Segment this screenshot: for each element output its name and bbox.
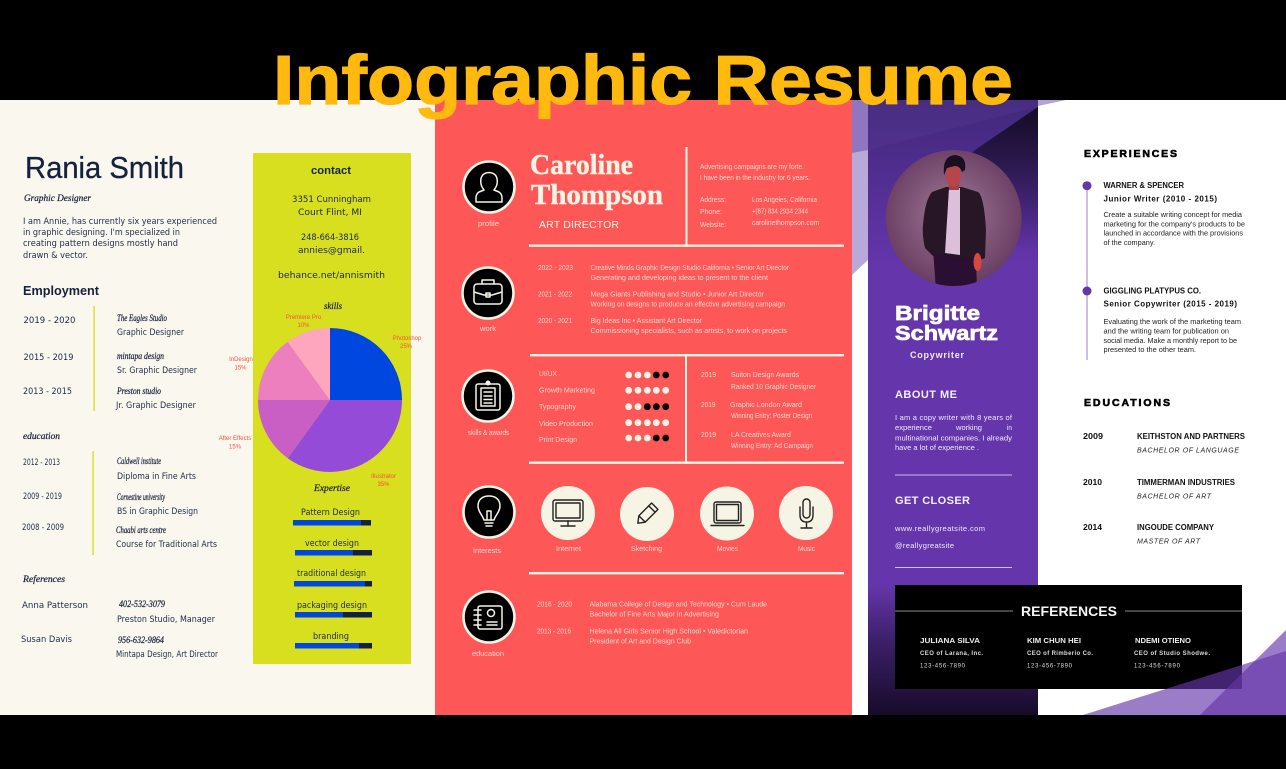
references list: Mintapa Design, Art Director [116, 650, 218, 660]
education entries: 2010 [1083, 478, 1103, 487]
educations heading: EDUCATIONS [1084, 397, 1170, 409]
work history: Generating and developing ideas to present to the client [590, 275, 768, 282]
portrait photo [886, 150, 1022, 290]
reference: Kim Chun Hei: 123-456-7890 [1027, 664, 1073, 670]
expertise bars: branding [313, 632, 349, 642]
experience entry: Giggling Platypus: Senior Copywriter (2015 - 2019) [1104, 300, 1237, 308]
awards list: Winning Entry: Poster Design [731, 413, 812, 420]
about me text: experience [895, 423, 932, 432]
icon: sketching pencil [620, 487, 674, 541]
panel: Caroline Thompson resume [435, 100, 852, 715]
icon: movies laptop [700, 486, 754, 540]
name heading [895, 303, 998, 345]
education entries: 2014 [1083, 523, 1103, 532]
references list: 956-632-9864 [118, 635, 164, 645]
education timeline: Course for Traditional Arts [116, 540, 218, 550]
expertise bars: vector design [305, 539, 359, 549]
skills list [539, 371, 595, 444]
awards list: 2019 [701, 432, 716, 439]
profile text: Address: [700, 197, 726, 204]
awards list: LA Creatives Award [731, 432, 791, 439]
education history: Alabama College of Design and Technology • Cum Laude [590, 602, 767, 608]
education timeline: 2012 - 2013 [23, 458, 60, 468]
panel: Rania Smith resume [0, 100, 435, 715]
pie labels [219, 315, 422, 488]
reference: Juliana Silva: 123-456-7890 [920, 664, 966, 670]
education timeline: Diploma in Fine Arts [117, 472, 197, 482]
reference: Ndemi Otieno: 123-456-7890 [1134, 664, 1181, 670]
bio text: in graphic designing. I'm specialized in [23, 228, 180, 238]
education timeline: 2008 - 2009 [22, 523, 64, 533]
about me heading: ABOUT ME [895, 389, 957, 401]
icon: interests bulb [464, 486, 514, 538]
contact details: behance.net/annismith [278, 271, 385, 281]
work history: Big Ideas Inc • Assistant Art Director [590, 318, 703, 325]
contact details: annies@gmail. [298, 246, 365, 256]
shirt [945, 188, 960, 255]
job title: Copywriter [910, 350, 964, 360]
jacket [923, 187, 986, 262]
work history: Working on designs to produce an effective advertising campaign [590, 302, 785, 308]
awards list: Ranked 10 Graphic Designer [731, 384, 817, 391]
name heading: Schwartz [895, 323, 998, 345]
face [946, 166, 961, 187]
education entries: 2009 [1083, 432, 1104, 441]
icon: internet monitor [541, 486, 595, 540]
job title: Graphic Designer [24, 193, 92, 203]
work history: Mega Giants Publishing and Studio • Junior Art Director [590, 292, 765, 298]
divider lines [529, 147, 844, 574]
icon: work briefcase [462, 268, 514, 318]
expertise bars: Pattern Design [301, 508, 360, 518]
contact links [894, 524, 985, 550]
name heading: Rania Smith [25, 150, 184, 185]
skills list: Print Design [539, 437, 577, 444]
reference: Juliana Silva: JULIANA SILVA [920, 636, 981, 645]
divider [895, 567, 1012, 568]
pie labels: 15% [234, 366, 247, 372]
experience entry: Warner and Spencer [1104, 181, 1245, 247]
employment timeline: Jr. Graphic Designer [115, 401, 196, 411]
about me text: multinational companies. I already [895, 434, 1012, 442]
awards list: 2019 [701, 372, 716, 379]
experience entry: Giggling Platypus: Evaluating the work of the marketing team [1104, 319, 1241, 326]
icon: music microphone [779, 486, 833, 540]
education entries: MASTER OF ART [1137, 538, 1201, 546]
name heading: Brigitte [895, 303, 980, 325]
job title: ART DIRECTOR [539, 219, 619, 231]
about me text: have a lot of experience . [895, 443, 979, 452]
employment heading: Employment [23, 283, 100, 298]
education entries: BACHELOR OF ART [1137, 494, 1212, 500]
pie labels: InDesign [229, 357, 253, 363]
icon label: internet: Internet [556, 546, 581, 553]
education history: Bachelor of Fine Arts Major in Advertising [590, 612, 719, 618]
pie labels: 25% [400, 344, 413, 350]
references list [21, 599, 218, 660]
references list: Anna Patterson [22, 601, 88, 611]
profile text: +(87) 834 2934 2344 [752, 208, 808, 216]
icon label: work: work [479, 326, 497, 333]
contact details: 3351 Cunningham [292, 195, 371, 205]
skills list: Video Production [539, 421, 593, 428]
reference: Ndemi Otieno [1134, 636, 1210, 670]
education entries: TIMMERMAN INDUSTRIES [1137, 478, 1236, 487]
contact links: @reallygreatsite [895, 541, 954, 550]
work history: 2022 - 2023 [538, 265, 573, 272]
pie labels: After Effects [219, 436, 251, 442]
experience entry: Warner and Spencer: WARNER & SPENCER [1104, 181, 1184, 190]
bio text: creating pattern designs mostly hand [23, 239, 178, 249]
skills list: Growth Marketing [539, 388, 595, 394]
bio text [23, 217, 217, 261]
icon label: interests: Interests [473, 548, 502, 555]
employment timeline [23, 306, 197, 411]
references list: Susan Davis [21, 635, 73, 645]
experience entry: Giggling Platypus: GIGGLING PLATYPUS CO. [1104, 286, 1201, 296]
decorative bottom right shapes [1083, 630, 1286, 715]
experience entry: Giggling Platypus [1104, 286, 1241, 354]
work history: 2021 - 2022 [538, 292, 572, 298]
title: Infographic Resume [273, 41, 1013, 119]
education history: President of Art and Design Club [590, 638, 691, 646]
bio text: I am Annie, has currently six years experienced [23, 217, 217, 227]
pie labels: Photoshop [393, 336, 422, 342]
employment timeline: 2019 - 2020 [24, 316, 76, 326]
experience entry: Giggling Platypus: and the writing team for publication on [1104, 328, 1229, 336]
experience entry: Warner and Spencer: Junior Writer (2010 - 2015) [1104, 194, 1217, 204]
references list: Preston Studio, Manager [117, 615, 215, 625]
expertise bars: packaging design [297, 601, 367, 611]
profile text: Los Angeles, California [752, 197, 817, 204]
profile text [700, 164, 819, 229]
bio text: drawn & vector. [23, 251, 88, 261]
education timeline: 2009 - 2019 [23, 492, 62, 502]
contact details: Court Flint, MI [298, 208, 362, 218]
hand [974, 253, 982, 271]
experience entry: Giggling Platypus: social media. Make a monthly report to be [1104, 338, 1237, 345]
about me text: working [955, 423, 982, 432]
expertise bars [293, 508, 372, 648]
contact details: 248-664-3816 [301, 233, 359, 243]
awards list: 2019 [701, 402, 716, 409]
icon label: profile: profile [478, 221, 499, 228]
profile text: Advertising campaigns are my forte. [700, 164, 804, 171]
education entries [1083, 432, 1246, 546]
work history: Creative Minds Graphic Design Studio California • Senior Art Director [590, 265, 790, 272]
about me text: I am a copy writer with 8 years of [895, 413, 1013, 422]
awards list [701, 372, 817, 450]
panel: contact sidebar [219, 153, 422, 664]
reference: Kim Chun Hei [1027, 636, 1093, 670]
experience entry: Warner and Spencer: of the company. [1104, 240, 1155, 247]
expertise heading: Expertise [313, 483, 350, 493]
education timeline: Chaabi arts centre [116, 525, 166, 535]
education timeline: Caldwell institute [117, 456, 161, 466]
education history: 2016 - 2020 [537, 602, 572, 608]
employment timeline: Preston studio [116, 386, 161, 396]
awards list: Winning Entry: Ad Campaign [731, 443, 813, 450]
reference: Kim Chun Hei: CEO of Rimberio Co. [1027, 651, 1093, 657]
icon label: sketching: Sketching [631, 546, 662, 553]
reference: Kim Chun Hei: KIM CHUN HEI [1027, 636, 1081, 645]
experience timeline [1082, 181, 1092, 360]
work history: 2020 - 2021 [538, 318, 572, 325]
skill rating dots [625, 372, 669, 441]
experience entry: Warner and Spencer: marketing for the company's products to be [1104, 222, 1245, 228]
education entries: BACHELOR OF LANGUAGE [1137, 448, 1239, 454]
awards list: Graphic London Award [730, 402, 802, 409]
about me text [895, 413, 1013, 452]
icon label: skills and awards: skills & awards [468, 430, 509, 437]
experience entry: Warner and Spencer: Create a suitable writing concept for media [1104, 212, 1242, 219]
pie labels: Premiere Pro [286, 315, 322, 321]
icon label: music: Music [798, 546, 815, 553]
name heading [530, 149, 663, 211]
experience entry: Giggling Platypus: presented to the other team. [1104, 347, 1196, 354]
employment timeline: The Eagles Studio [117, 313, 167, 323]
pie labels: 15% [229, 444, 242, 450]
work history [538, 265, 790, 335]
education entries: KEITHSTON AND PARTNERS [1137, 432, 1246, 441]
profile text: carolinethompson.com [752, 220, 819, 227]
employment timeline: Graphic Designer [117, 328, 184, 338]
education history: 2013 - 2016 [537, 628, 571, 636]
skills list: UI/UX [539, 371, 557, 378]
employment timeline: 2013 - 2015 [23, 387, 72, 397]
experiences heading: EXPERIENCES [1084, 148, 1177, 160]
pie labels: 10% [297, 323, 310, 329]
icon: skills clipboard [462, 370, 514, 422]
divider [895, 474, 1012, 476]
pie labels: 35% [377, 482, 390, 488]
education timeline: BS in Graphic Design [117, 507, 198, 517]
contact details [278, 195, 385, 281]
pie chart: skills [258, 328, 402, 472]
references heading: REFERENCES [1021, 603, 1117, 619]
skills heading: skills [324, 301, 342, 311]
get closer heading: GET CLOSER [895, 495, 970, 507]
hair [944, 155, 965, 175]
education history: Helena All Girls Senior High School • Valedictorian [590, 628, 748, 636]
about me text: in [1007, 423, 1012, 432]
expertise bars: traditional design [297, 569, 366, 579]
name heading: Thompson [531, 179, 663, 211]
references heading: References [22, 574, 66, 584]
education heading: education [23, 431, 61, 441]
panel: Brigitte Schwartz resume [852, 100, 1286, 715]
education entries: INGOUDE COMPANY [1137, 523, 1215, 532]
icon: profile [464, 162, 514, 212]
contact links: www.reallygreatsite.com [894, 524, 985, 533]
icon: education notebook [464, 592, 514, 642]
awards list: Suiton Design Awards [731, 372, 799, 379]
icon label: education: education [472, 651, 504, 658]
decorative top left shapes [852, 100, 1066, 275]
name heading: Caroline [530, 149, 633, 181]
trousers [934, 254, 977, 286]
reference: Ndemi Otieno: NDEMI OTIENO [1135, 636, 1191, 645]
profile text: I have been in the industry for 6 years. [700, 175, 810, 182]
education timeline: Cornestine university [117, 492, 165, 502]
purple column [868, 100, 1038, 715]
pie labels: Illustrator [371, 474, 396, 480]
icon label: movies: Movies [717, 546, 738, 553]
neck [949, 183, 959, 190]
work history: Commissioning specialists, such as artists, to work on projects [590, 328, 787, 335]
profile text: Website: [700, 222, 726, 229]
reference: Juliana Silva: CEO of Larana, Inc. [920, 651, 983, 657]
profile text: Phone: [700, 209, 722, 216]
decorative dark facets [868, 100, 1038, 260]
employment timeline: mintapa design [117, 351, 164, 361]
employment timeline: 2015 - 2019 [24, 353, 74, 363]
education timeline [22, 451, 218, 555]
employment timeline: Sr. Graphic Designer [117, 366, 197, 376]
contact heading: contact [311, 165, 351, 177]
reference: Ndemi Otieno: CEO of Studio Shodwe. [1134, 651, 1210, 657]
reference: Juliana Silva [920, 636, 983, 670]
references list: 402-532-3079 [119, 599, 165, 609]
references box [895, 585, 1242, 689]
education history [537, 602, 767, 646]
experience entry: Warner and Spencer: launched in accordance with the provisions [1104, 230, 1244, 238]
skills list: Typography [539, 404, 576, 411]
